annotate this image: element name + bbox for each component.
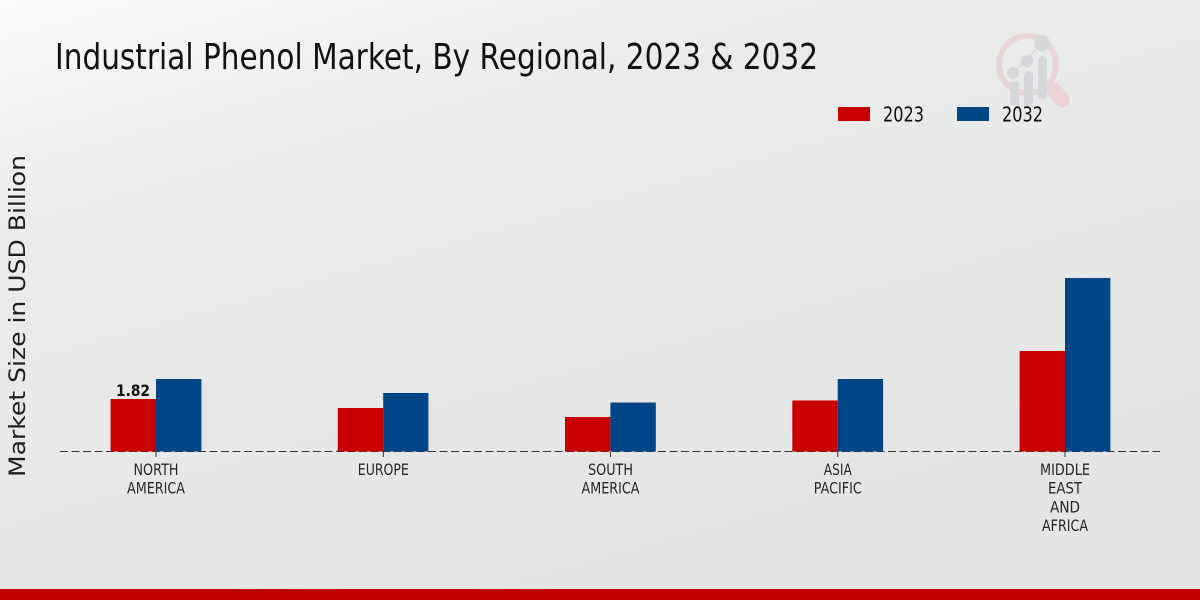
legend item: 2032	[957, 102, 1043, 126]
label: North America	[127, 460, 185, 498]
bars: Europe	[338, 393, 428, 452]
label: Middle East and Africa: AND	[1050, 498, 1080, 516]
bars: Asia Pacific	[792, 379, 883, 452]
legend	[838, 102, 1043, 126]
label: Middle East and Africa: MIDDLE	[1040, 460, 1090, 479]
label: Middle East and Africa	[1040, 460, 1090, 535]
label: Asia Pacific	[814, 460, 862, 498]
label: North America: NORTH	[134, 460, 178, 479]
label: Asia Pacific: PACIFIC	[814, 478, 862, 498]
bars: South America	[565, 402, 656, 452]
legend item: 2023: 2023	[883, 102, 924, 126]
title: Industrial Phenol Market, By Regional, 2023 & 2032	[55, 37, 818, 78]
bar chart	[60, 278, 1160, 457]
bars: Middle East and Africa	[1020, 278, 1110, 452]
label: North America: AMERICA	[127, 478, 185, 498]
label: Asia Pacific: ASIA	[824, 460, 852, 479]
label: South America: AMERICA	[582, 478, 640, 498]
legend item: 2032: 2032	[1002, 102, 1043, 126]
y axis label: Market Size in USD Billion	[5, 155, 31, 477]
watermark logo icon	[999, 35, 1062, 106]
x axis baseline	[60, 450, 1160, 452]
label: Europe: EUROPE	[358, 460, 409, 479]
legend item: 2023	[838, 102, 924, 126]
value label: 1.82: 1.82	[116, 381, 150, 400]
label: South America	[582, 460, 640, 498]
bars: North America	[111, 379, 201, 452]
x axis labels	[127, 460, 1090, 535]
label: Middle East and Africa: EAST	[1048, 478, 1082, 498]
label: Middle East and Africa: AFRICA	[1042, 516, 1088, 535]
footer bar	[0, 589, 1200, 600]
label: South America: SOUTH	[588, 460, 633, 479]
